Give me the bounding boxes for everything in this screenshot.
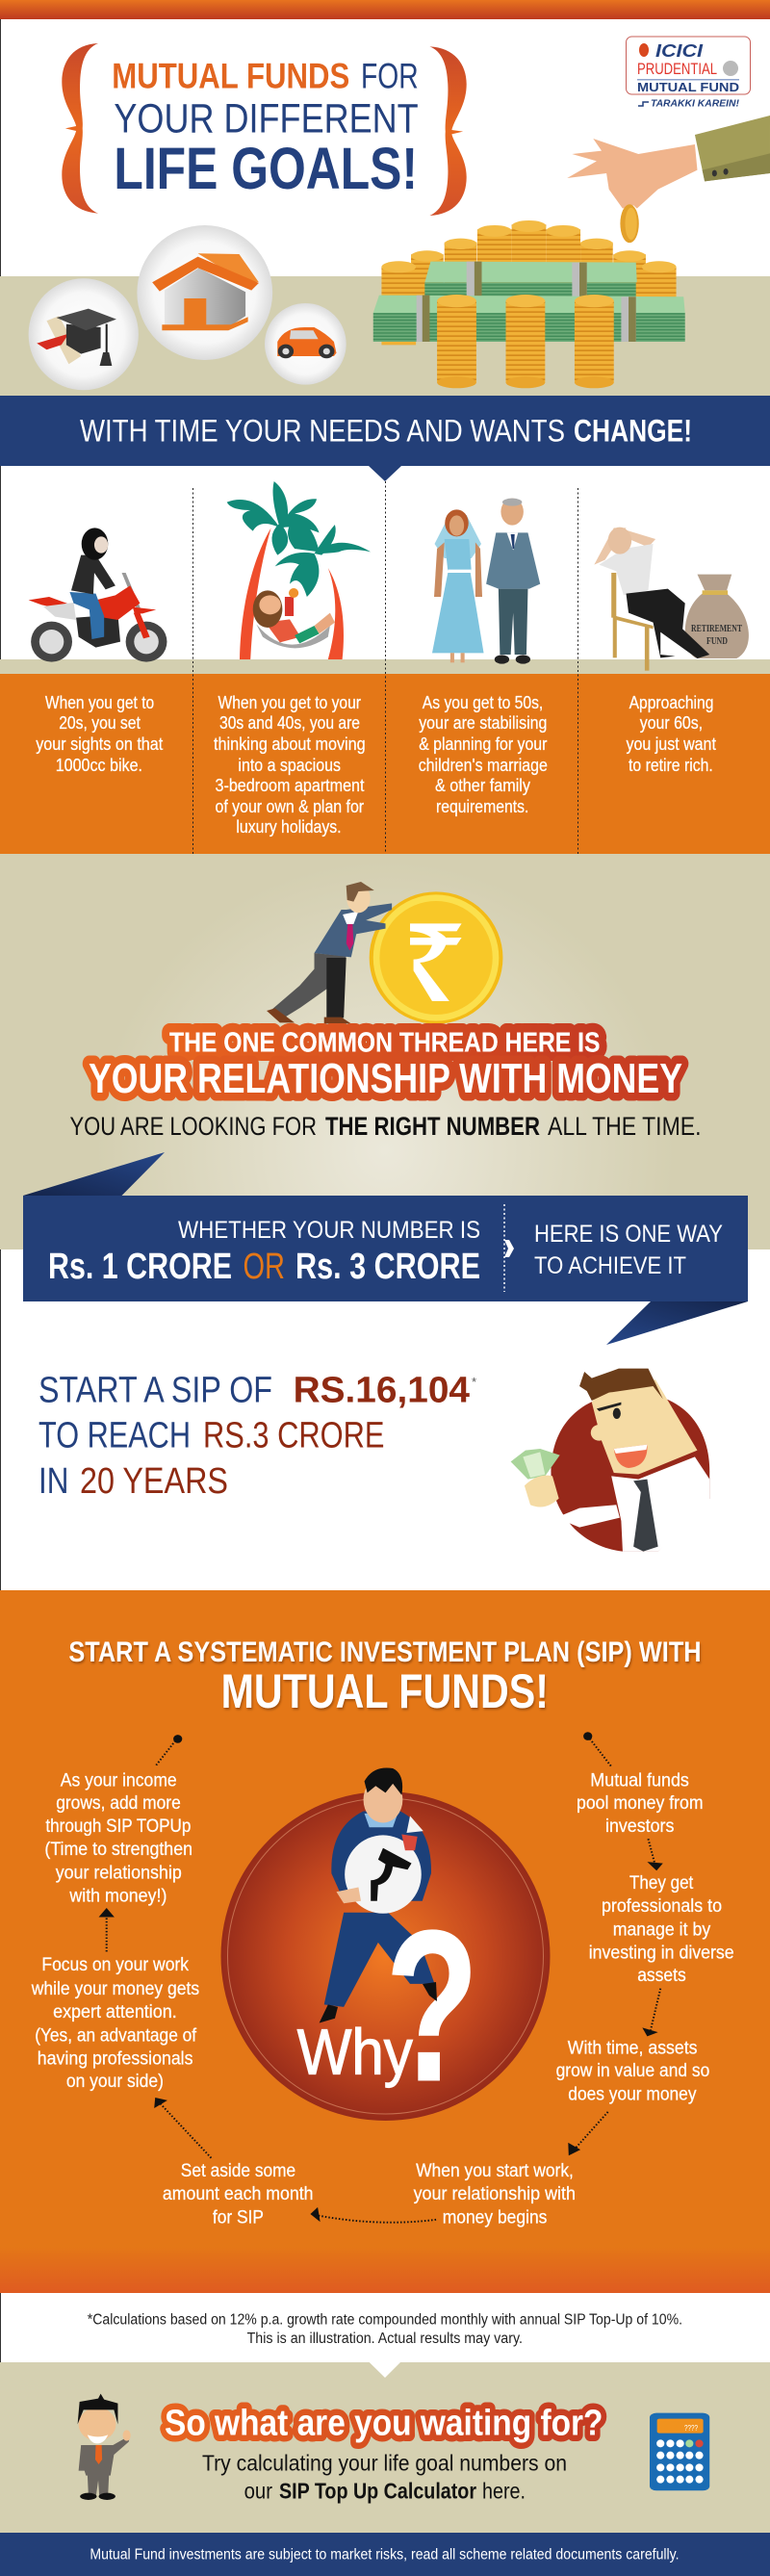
text: step start work xyxy=(414,2161,576,2228)
text: step assets grow: does your money xyxy=(568,2085,697,2105)
text: step start work: money begins xyxy=(443,2207,547,2228)
ribbon: crore target: TO ACHIEVE IT xyxy=(534,1252,686,1279)
text: life stage 20s: 20s, you set xyxy=(59,713,141,733)
icon: hand dropping coin xyxy=(567,116,770,243)
text: life stage 30s and 40s: 3-bedroom apartment xyxy=(216,776,364,795)
text: calculator prompt: our xyxy=(244,2479,272,2504)
text: step SIP top up: with money!) xyxy=(68,1886,167,1906)
ribbon: crore target: Rs. 1 CRORE xyxy=(48,1247,232,1287)
text: step focus on work: expert attention. xyxy=(53,2002,177,2022)
text: SIP target xyxy=(38,1371,476,1502)
icon: calculator xyxy=(650,2413,709,2490)
icon: coin stacks and banknotes xyxy=(373,220,685,388)
ribbon: crore target: HERE IS ONE WAY xyxy=(534,1221,723,1248)
text: step focus on work xyxy=(31,1955,199,2092)
text: SIP target: IN xyxy=(38,1461,68,1502)
text: step assets grow: With time, assets xyxy=(568,2038,697,2058)
text: calculator prompt xyxy=(202,2451,567,2504)
banner: needs and wants xyxy=(0,396,770,481)
text: step focus on work: while your money gets xyxy=(31,1979,199,1999)
text: life stage 30s and 40s: When you get to your xyxy=(218,693,361,712)
banner: needs and wants: WITH TIME YOUR NEEDS AND WANTS xyxy=(80,413,565,448)
text: step set aside xyxy=(163,2161,314,2228)
text: step professionals manage: investing in diverse xyxy=(589,1943,734,1963)
text: step SIP top up: grows, add more xyxy=(56,1793,181,1814)
text: step SIP top up xyxy=(44,1770,192,1906)
logo: ICICI Prudential Mutual Fund: MUTUAL FUND xyxy=(637,81,739,94)
text: step mutual funds pool money: investors xyxy=(605,1816,674,1837)
ribbon: crore target: OR xyxy=(243,1247,285,1287)
text: SIP target: RS.3 CRORE xyxy=(203,1415,385,1455)
text: life stage 30s and 40s xyxy=(214,693,366,837)
panel: relationship with money xyxy=(0,854,770,1249)
text: life stage 20s: your sights on that xyxy=(36,734,163,754)
text: step assets grow xyxy=(556,2038,709,2105)
hero illustrations xyxy=(29,116,770,390)
text: step SIP top up: (Time to strengthen xyxy=(44,1840,192,1860)
icon: happy man holding cash xyxy=(511,1369,709,1552)
heading sticker: common thread: THE ONE COMMON THREAD HERE IS xyxy=(169,1028,601,1059)
text: life stage 30s and 40s: luxury holidays. xyxy=(236,817,342,837)
hero title: MUTUAL FUNDS xyxy=(112,57,349,96)
text: calculator prompt: SIP Top Up Calculator xyxy=(279,2479,476,2504)
text: life stage 50s: As you get to 50s, xyxy=(423,693,543,712)
heading sticker: so what are you waiting for: So what are you waiting for? xyxy=(165,2403,603,2443)
text: step mutual funds pool money: pool money from xyxy=(577,1793,704,1814)
text: life stage 60s: your 60s, xyxy=(640,713,703,733)
text: step professionals manage: They get xyxy=(629,1873,694,1893)
text: right number: ALL THE TIME. xyxy=(548,1112,701,1141)
text: life stage 30s and 40s: 30s and 40s, you are xyxy=(219,713,360,733)
panel: call to action xyxy=(0,2362,770,2533)
ribbon: crore target: WHETHER YOUR NUMBER IS xyxy=(178,1217,480,1244)
icon: waving cartoon man xyxy=(78,2394,131,2500)
text: step assets grow: grow in value and so xyxy=(556,2061,709,2081)
text: step set aside: for SIP xyxy=(213,2207,264,2228)
text: life stage 30s and 40s: thinking about moving xyxy=(214,734,366,754)
icon: retiree with retirement fund bag xyxy=(594,528,749,671)
text: step focus on work: on your side) xyxy=(66,2072,164,2092)
icon: man's right shoe xyxy=(423,1982,437,2001)
text: step professionals manage: professionals to xyxy=(602,1896,722,1917)
text: life stage 20s: When you get to xyxy=(45,693,154,712)
text: calculator prompt: Try calculating your life goal numbers on xyxy=(202,2451,567,2476)
retirement bag label: RETIREMENT xyxy=(691,624,742,634)
text: life stage 60s: you just want xyxy=(626,734,716,754)
text: calculator prompt: here. xyxy=(482,2479,526,2504)
footnote: *Calculations based on 12% p.a. growth rate compounded monthly with annual SIP Top-Up of 10%. xyxy=(88,2311,682,2328)
text: SIP target: RS.16,104 xyxy=(294,1371,470,1411)
text: life stage 20s xyxy=(36,693,163,775)
text: life stage 50s xyxy=(419,693,548,816)
hero title: LIFE GOALS! xyxy=(114,136,418,201)
ribbon: crore target: Rs. 3 CRORE xyxy=(295,1247,480,1287)
text: step professionals manage: assets xyxy=(637,1966,686,1986)
page border line xyxy=(0,0,1,2576)
logo: ICICI Prudential Mutual Fund: PRUDENTIAL xyxy=(637,60,717,78)
panel bottom gradient xyxy=(0,2247,770,2293)
life stage illustrations xyxy=(29,481,749,671)
text: SIP target: 20 YEARS xyxy=(80,1461,228,1502)
top bar xyxy=(0,0,770,19)
icon: older couple xyxy=(432,499,540,664)
life stage ground strip xyxy=(0,659,770,674)
icon: man pushing rupee coin xyxy=(267,882,502,1024)
logo: ICICI Prudential Mutual Fund: ICICI xyxy=(655,41,704,61)
text: step SIP top up: your relationship xyxy=(56,1864,182,1883)
text: life stage 60s: to retire rich. xyxy=(629,756,713,775)
retirement bag label xyxy=(691,624,742,647)
text: step set aside: amount each month xyxy=(163,2184,314,2204)
cycle arrows xyxy=(99,1732,663,2223)
text: step start work: your relationship with xyxy=(414,2184,576,2204)
text: life stage 50s: & planning for your xyxy=(419,734,547,754)
footer disclaimer xyxy=(0,2533,770,2576)
text: step professionals manage xyxy=(589,1873,734,1986)
text: life stage 20s: 1000cc bike. xyxy=(56,756,142,775)
text: SIP target: TO REACH xyxy=(38,1415,191,1455)
text: life stage 60s: Approaching xyxy=(629,693,713,712)
bubble: car xyxy=(265,303,346,385)
text: step focus on work: (Yes, an advantage of xyxy=(35,2025,197,2046)
banner: needs and wants: CHANGE! xyxy=(574,413,692,448)
text: right number xyxy=(69,1112,701,1141)
ground band: hero xyxy=(0,276,770,396)
text: life stage 30s and 40s: into a spacious xyxy=(238,756,341,775)
text: life stage 50s: requirements. xyxy=(436,797,528,816)
icon: man holding rupee bag xyxy=(320,1768,435,2023)
footer disclaimer: Mutual Fund investments are subject to market risks, read all scheme related documents carefully. xyxy=(90,2546,680,2563)
text: life stage 50s: your are stabilising xyxy=(419,713,547,733)
hero title: YOUR DIFFERENT xyxy=(114,95,419,142)
text: right number: THE RIGHT NUMBER xyxy=(325,1112,540,1141)
text: life stage 50s: children's marriage xyxy=(419,756,548,775)
text: life stage 50s: & other family xyxy=(435,776,530,795)
text: step set aside: Set aside some xyxy=(181,2161,295,2181)
retirement bag label: FUND xyxy=(706,636,728,647)
text: step mutual funds pool money: Mutual funds xyxy=(590,1770,689,1790)
text: right number: YOU ARE LOOKING FOR xyxy=(69,1112,317,1141)
ribbon: crore target xyxy=(23,1152,748,1345)
text: life stage 30s and 40s: of your own & plan for xyxy=(216,797,364,816)
label: Why: Why xyxy=(297,2016,413,2088)
text: step SIP top up: As your income xyxy=(61,1770,177,1790)
icon: motorbike rider xyxy=(29,528,167,662)
text: step start work: When you start work, xyxy=(416,2161,574,2181)
text: step SIP top up: through SIP TOPUp xyxy=(45,1816,191,1837)
calculator display: ???? xyxy=(684,2424,698,2433)
text: step focus on work: Focus on your work xyxy=(41,1955,189,1975)
panel: start a SIP xyxy=(0,1590,770,2249)
text: SIP target: * xyxy=(472,1375,476,1389)
heading: systematic investment plan xyxy=(68,1636,702,1718)
hero title: FOR xyxy=(361,57,419,96)
footnote: This is an illustration. Actual results may vary. xyxy=(247,2331,523,2347)
heading: systematic investment plan: MUTUAL FUNDS! xyxy=(221,1664,549,1718)
logo: ICICI Prudential Mutual Fund xyxy=(626,37,751,110)
heading sticker: common thread: THE ONE COMMON THREAD HERE IS xyxy=(169,1028,601,1059)
bubble: house xyxy=(137,225,272,360)
text: step professionals manage: manage it by xyxy=(613,1919,711,1940)
text: step mutual funds pool money xyxy=(577,1770,704,1837)
life stage text panel xyxy=(0,674,770,854)
question mark: ? xyxy=(385,1885,479,2127)
title braces xyxy=(62,43,467,216)
logo: ICICI Prudential Mutual Fund: TARAKKI KAREIN! xyxy=(651,98,739,110)
text: life stage 60s xyxy=(626,693,716,775)
text: SIP target: START A SIP OF xyxy=(38,1371,272,1411)
footnote xyxy=(88,2311,682,2347)
icon: palm trees and hammock xyxy=(227,481,371,659)
text: step focus on work: having professionals xyxy=(38,2048,192,2069)
bubble: graduation cap xyxy=(29,278,139,390)
hero title xyxy=(62,43,467,216)
chart: why circle xyxy=(221,1768,551,2127)
heading sticker: common thread xyxy=(89,1028,682,1102)
